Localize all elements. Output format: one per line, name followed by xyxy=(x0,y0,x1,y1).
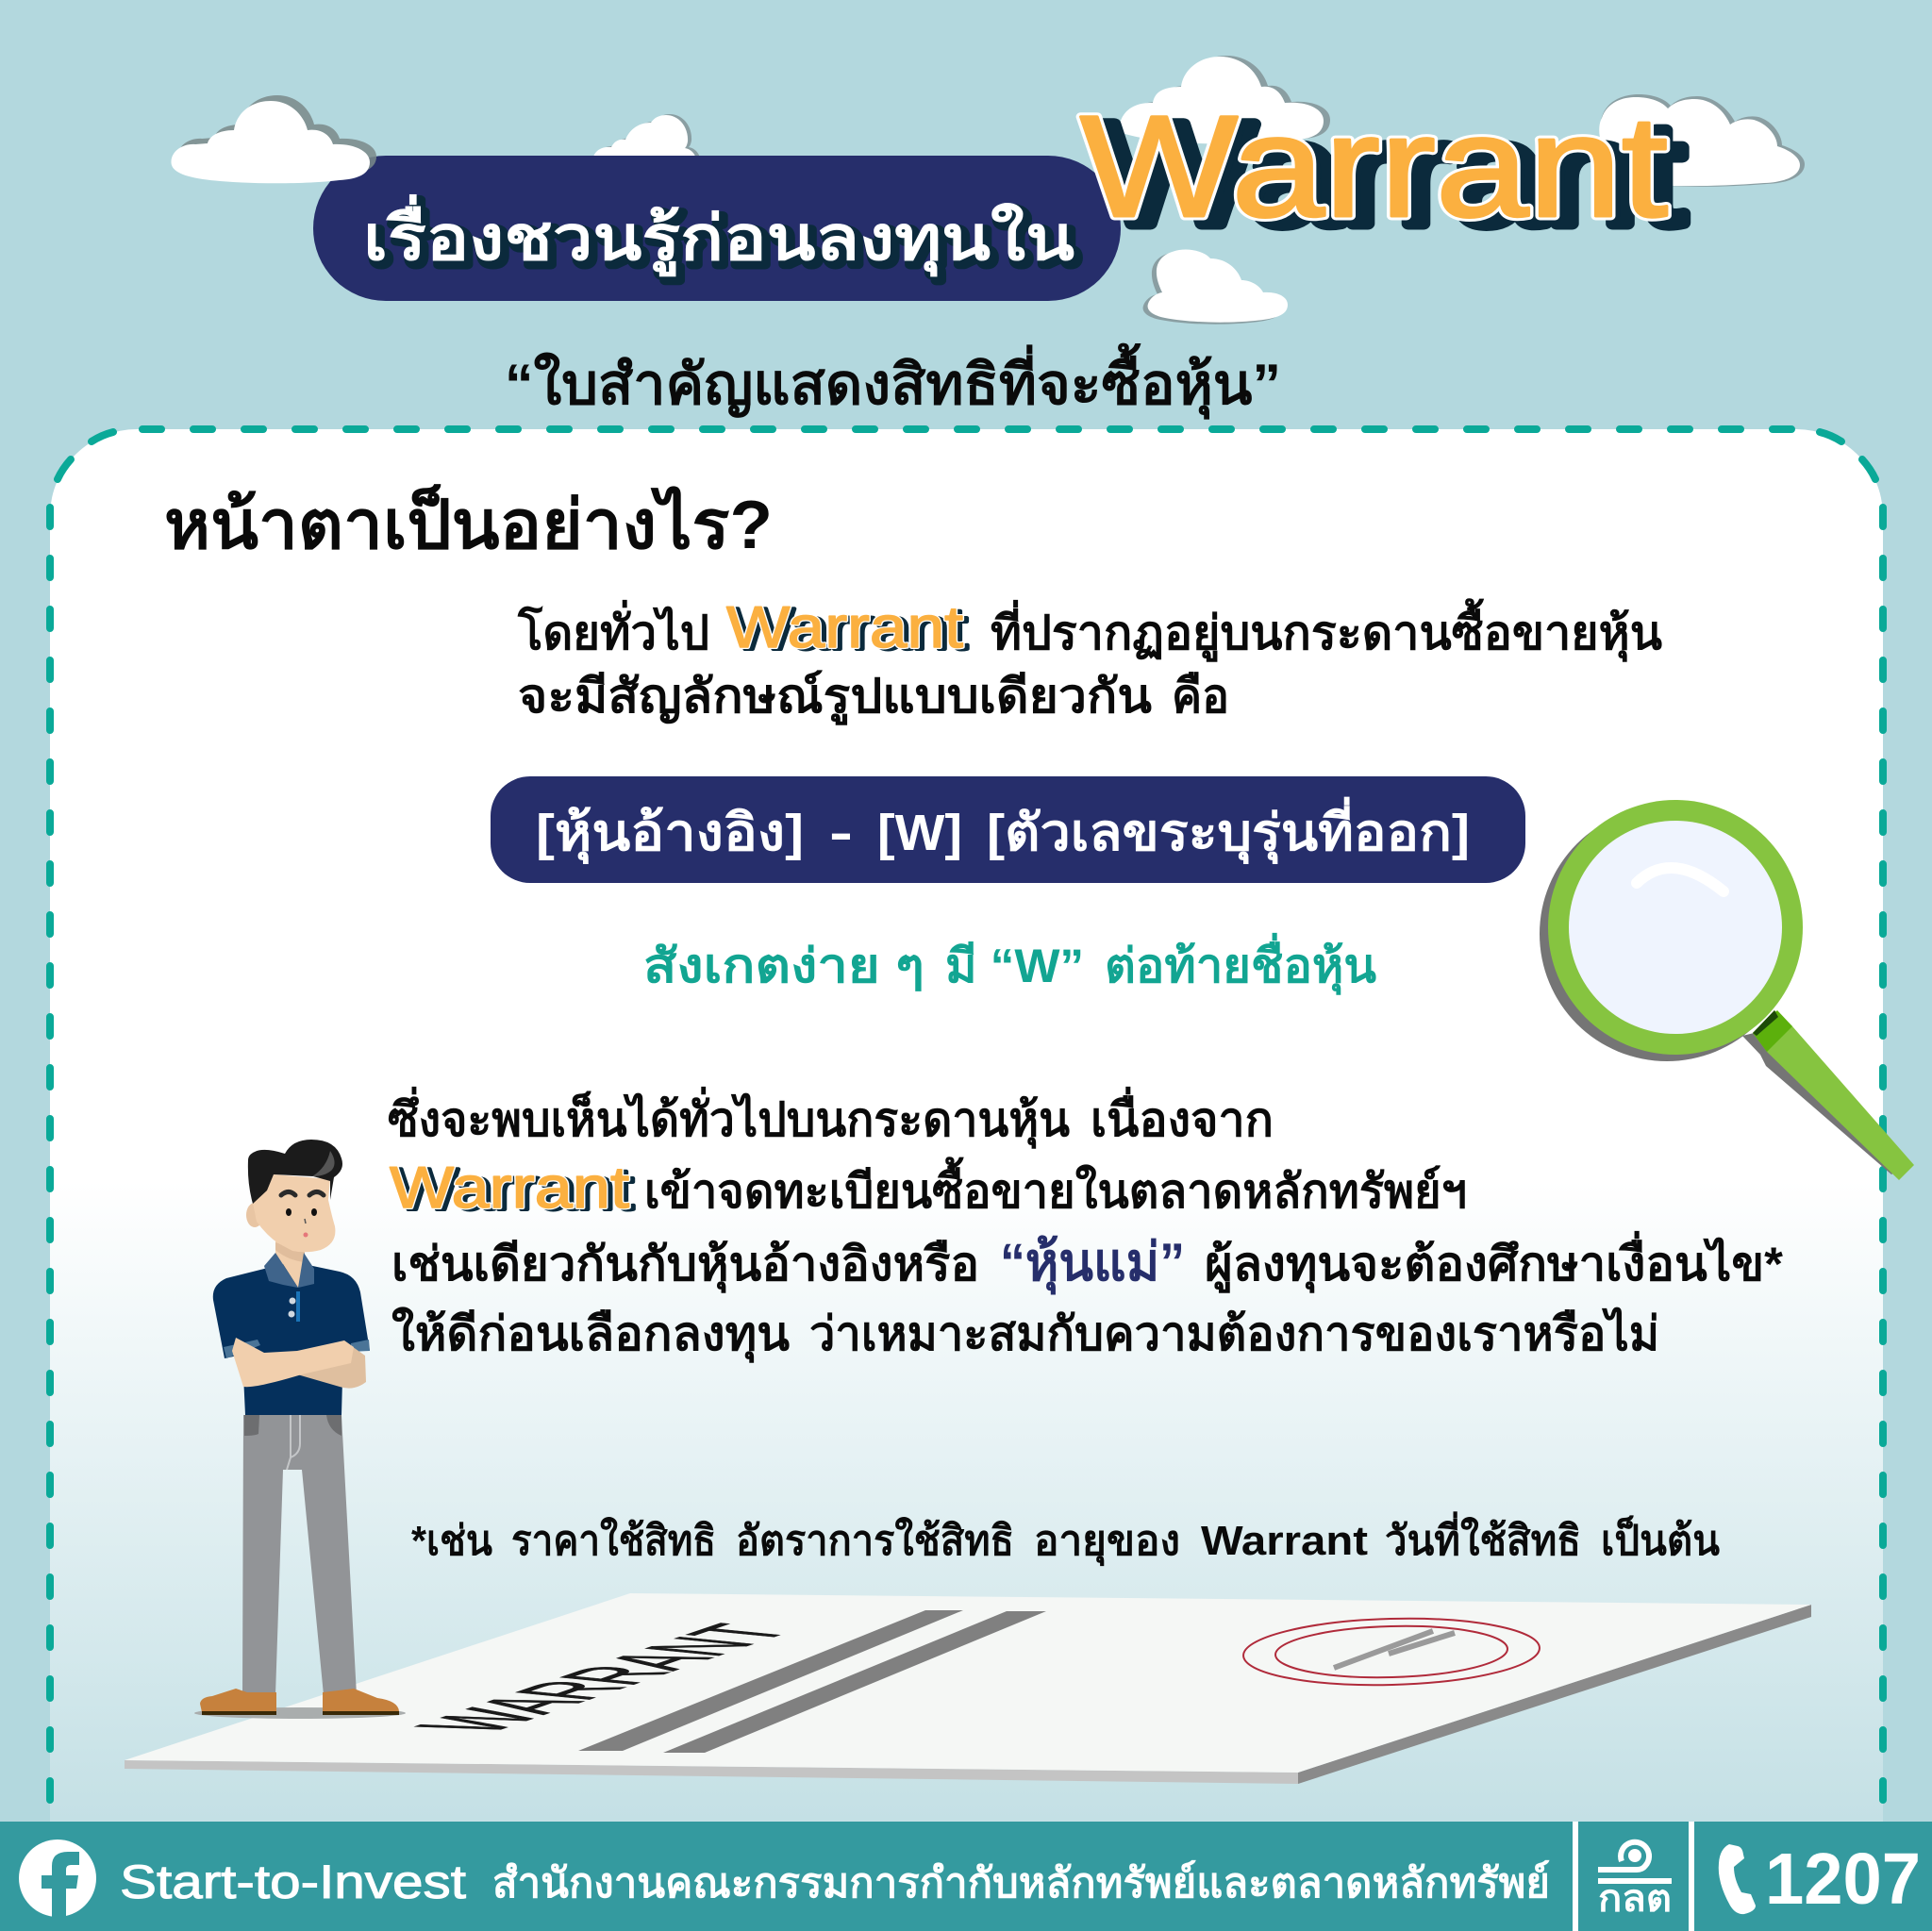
logo: SEC: กลต xyxy=(1598,1878,1672,1920)
text block: intro: จะมีสัญลักษณ์รูปแบบเดียวกัน xyxy=(518,670,1152,725)
text block: intro xyxy=(517,595,1662,725)
cloud: small behind pill xyxy=(593,114,700,158)
cloud: large behind Warrant xyxy=(1119,56,1330,144)
symbol pill: - xyxy=(829,805,853,861)
text block: explanation: เนื่องจาก xyxy=(1091,1087,1274,1146)
teal note: สังเกตง่าย ๆ xyxy=(643,940,924,992)
title: Warrant: Warrant xyxy=(1080,86,1668,247)
text block: explanation: เข้าจดทะเบียนซื้อขายในตลาดหลักทรัพย์ฯ xyxy=(644,1157,1467,1218)
text block: explanation: ให้ดีก่อนเลือกลงทุน xyxy=(391,1307,790,1363)
cloud: below Warrant xyxy=(1143,250,1288,325)
inline Warrant 2: Warrant xyxy=(390,1156,629,1221)
footnote: *เช่น xyxy=(411,1518,492,1564)
teal note: ต่อท้ายชื่อหุ้น xyxy=(1105,933,1376,995)
document: warrant paper xyxy=(125,1593,1811,1784)
footer: page name: Start-to-Invest xyxy=(120,1856,466,1908)
logo: SEC xyxy=(1598,1842,1672,1920)
footnote xyxy=(411,1511,1720,1567)
footnote: ราคาใช้สิทธิ xyxy=(511,1516,716,1564)
icon: phone xyxy=(1719,1844,1756,1914)
title: Warrant: Warrant xyxy=(1080,86,1668,247)
inline Warrant 2: Warrant xyxy=(394,1157,634,1223)
text block: explanation: ว่าเหมาะสมกับความต้องการของเราหรือไม่ xyxy=(809,1307,1659,1360)
title: Warrant: Warrant xyxy=(1097,93,1685,255)
footnote: วันที่ใช้สิทธิ xyxy=(1385,1511,1581,1564)
inline Warrant 1: Warrant xyxy=(731,597,968,662)
footnote: Warrant xyxy=(1201,1518,1368,1564)
heading: หน้าตาเป็นอย่างไร? xyxy=(164,484,773,563)
inline Warrant 1: Warrant xyxy=(726,595,963,660)
footer bar xyxy=(0,1822,1932,1931)
document: warrant paper: WARRANT xyxy=(391,1621,818,1736)
text block: explanation: ผู้ลงทุนจะต้องศึกษาเงื่อนไข* xyxy=(1205,1231,1784,1293)
symbol pill: [ตัวเลขระบุรุ่นที่ออก] xyxy=(987,796,1470,865)
footer: organisation: สำนักงานคณะกรรมการกำกับหลักทรัพย์และตลาดหลักทรัพย์ xyxy=(492,1859,1550,1906)
teal note xyxy=(643,933,1376,995)
panel: main xyxy=(50,429,1883,1822)
symbol pill xyxy=(491,776,1525,883)
inline Warrant 1: Warrant xyxy=(726,595,963,660)
title: thai line xyxy=(363,193,1079,282)
cloud: left xyxy=(171,95,376,183)
cloud: right xyxy=(1599,94,1805,187)
hotline number: 1207 xyxy=(1765,1839,1921,1920)
title: thai line: เรื่องชวนรู้ก่อนลงทุนใน xyxy=(368,198,1079,282)
text block: explanation: เช่นเดียวกันกับหุ้นอ้างอิงหรือ xyxy=(391,1238,979,1293)
text block: intro: คือ xyxy=(1172,670,1229,723)
icon: facebook xyxy=(19,1839,96,1917)
footnote: อัตราการใช้สิทธิ xyxy=(736,1516,1014,1564)
teal note: มี “W” xyxy=(945,940,1084,992)
title pill xyxy=(313,156,1121,301)
text block: explanation: “หุ้นแม่” xyxy=(1000,1232,1185,1295)
icon: magnifier xyxy=(1540,800,1914,1180)
text block: explanation xyxy=(388,1087,1784,1363)
symbol pill: [หุ้นอ้างอิง] xyxy=(536,805,804,865)
inline Warrant 2: Warrant xyxy=(390,1156,629,1221)
character: man with crossed arms xyxy=(194,1140,406,1719)
footnote: เป็นต้น xyxy=(1601,1515,1720,1564)
footnote: อายุของ xyxy=(1034,1518,1180,1567)
symbol pill: [W] xyxy=(877,805,962,861)
subtitle: “ใบสำคัญแสดงสิทธิที่จะซื้อหุ้น” xyxy=(505,342,1281,420)
text block: intro: ที่ปรากฏอยู่บนกระดานซื้อขายหุ้น xyxy=(991,598,1662,662)
text block: intro: โดยทั่วไป xyxy=(517,600,709,659)
text block: explanation: ซึ่งจะพบเห็นได้ทั่วไปบนกระดานหุ้น xyxy=(388,1087,1070,1149)
title: thai line: เรื่องชวนรู้ก่อนลงทุนใน xyxy=(363,193,1074,277)
